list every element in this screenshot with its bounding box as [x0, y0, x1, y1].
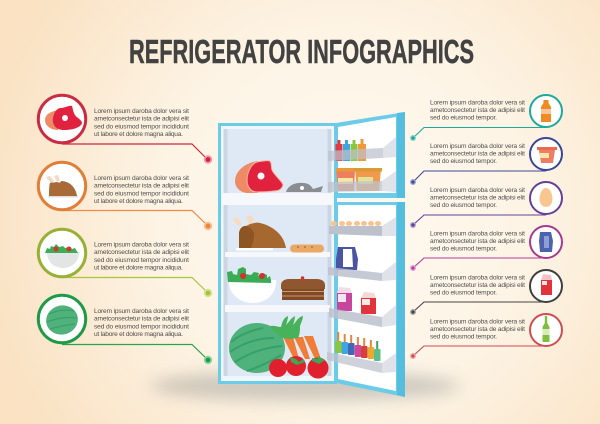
- text: egg: Lorem ipsum daroba dolor vera sit: [430, 187, 525, 194]
- door shelf with juice cartons: [329, 287, 396, 327]
- text: watermelon: ut labore et dolore magna aliqua.: [94, 331, 183, 338]
- text: bottle: [430, 100, 525, 122]
- text: milk bag: sed do eiusmod tempor.: [430, 246, 497, 252]
- text: wine: sed do eiusmod tempor.: [430, 334, 497, 340]
- text: meat: sed do eiusmod tempor incididunt: [94, 124, 189, 130]
- tomatoes: [269, 356, 328, 378]
- text: egg: sed do eiusmod tempor.: [430, 202, 497, 209]
- door shelf with eggs: [329, 217, 396, 236]
- salad bowl: [227, 267, 276, 303]
- icon: poultry: [38, 162, 86, 210]
- floor shadow: [150, 371, 460, 401]
- text: meat: [94, 108, 189, 138]
- connector: container: [413, 171, 546, 182]
- text: container: [430, 143, 525, 165]
- text: container: Lorem ipsum daroba dolor vera sit: [430, 143, 525, 150]
- text: juice: [430, 274, 525, 296]
- text: egg: [430, 187, 525, 209]
- icon: wine bottle: [530, 314, 562, 346]
- text: wine: [430, 318, 525, 340]
- text: container: sed do eiusmod tempor.: [430, 158, 497, 165]
- text: wine: Lorem ipsum daroba dolor vera sit: [430, 318, 525, 326]
- cake: [281, 276, 325, 300]
- door shelf with milk bag: [328, 247, 396, 281]
- icon: egg: [530, 182, 562, 214]
- panel: milk bag callout: [410, 226, 562, 271]
- text: milk bag: [430, 230, 525, 252]
- text: meat: Lorem ipsum daroba dolor vera sit: [94, 108, 189, 115]
- text: bottle: Lorem ipsum daroba dolor vera sit: [430, 100, 525, 106]
- text: watermelon: [94, 308, 189, 338]
- text: watermelon: sed do eiusmod tempor incididunt: [94, 324, 189, 330]
- icon: milk bag: [530, 226, 562, 258]
- text: wine: ametconsectetur ista de adipisi elit: [430, 326, 525, 333]
- text: salad: [94, 242, 189, 272]
- text: salad: ut labore et dolore magna aliqua.: [94, 264, 183, 272]
- text: meat: ametconsectetur ista de adipisi elit: [94, 116, 189, 123]
- text: poultry: ut labore et dolore magna aliqua.: [94, 198, 183, 205]
- text: poultry: Lorem ipsum daroba dolor vera sit: [94, 175, 189, 182]
- icon: bottle: [530, 95, 562, 127]
- text: bottle: ametconsectetur ista de adipisi elit: [430, 107, 525, 114]
- text: watermelon: ametconsectetur ista de adipisi elit: [94, 316, 189, 323]
- dot: egg: [410, 222, 416, 228]
- text: meat: ut labore et dolore magna aliqua.: [94, 131, 183, 138]
- fish: [286, 183, 323, 192]
- connector: watermelon: [62, 344, 208, 360]
- panel: watermelon callout: [38, 295, 212, 364]
- text: salad: sed do eiusmod tempor incididunt: [94, 257, 189, 264]
- panel: salad callout: [38, 229, 212, 297]
- text: milk bag: Lorem ipsum daroba dolor vera sit: [430, 230, 525, 238]
- text: poultry: [94, 175, 189, 205]
- panel: bottle callout: [410, 95, 562, 141]
- dot: wine: [410, 353, 416, 359]
- text: salad: ametconsectetur ista de adipisi elit: [94, 249, 189, 256]
- connector: salad: [62, 278, 208, 293]
- watermelon: [229, 323, 285, 373]
- icon: meat: [38, 95, 86, 143]
- lower door: [336, 202, 405, 397]
- carrots: [270, 316, 321, 359]
- icon: juice: [530, 270, 562, 302]
- door shelf with small bottles: [327, 332, 396, 373]
- panel: wine callout: [410, 314, 562, 359]
- dot: milk bag: [410, 265, 416, 271]
- upper door: [336, 112, 405, 198]
- text: poultry: ametconsectetur ista de adipisi elit: [94, 183, 189, 190]
- bread: [290, 244, 324, 252]
- connector: juice: [413, 302, 546, 312]
- icon: watermelon: [38, 295, 86, 343]
- text: juice: Lorem ipsum daroba dolor vera sit: [430, 274, 525, 282]
- turkey: [232, 215, 286, 250]
- text: milk bag: ametconsectetur ista de adipisi elit: [430, 238, 525, 245]
- connector: wine: [413, 346, 546, 356]
- fridge body: [218, 123, 337, 384]
- icon: salad: [38, 229, 86, 277]
- text: egg: ametconsectetur ista de adipisi elit: [430, 194, 525, 202]
- text: juice: ametconsectetur ista de adipisi elit: [430, 282, 525, 289]
- connector: egg: [413, 215, 546, 225]
- dot: poultry: [204, 222, 212, 230]
- panel: egg callout: [410, 182, 562, 228]
- fish eye: [300, 186, 304, 190]
- panel: meat callout: [38, 95, 212, 164]
- panel: poultry callout: [38, 162, 212, 230]
- door shelf with containers: [328, 168, 396, 192]
- text: bottle: sed do eiusmod tempor.: [430, 114, 497, 122]
- dot: juice: [410, 309, 416, 315]
- dot: bottle: [410, 135, 416, 141]
- dot: watermelon: [204, 356, 212, 364]
- dot: salad: [204, 289, 212, 297]
- door shelf with bottles: [328, 137, 396, 161]
- text: container: ametconsectetur ista de adipisi elit: [430, 150, 525, 158]
- panel: juice callout: [410, 270, 562, 315]
- text: poultry: sed do eiusmod tempor incididunt: [94, 190, 189, 198]
- connector: milk bag: [413, 258, 546, 268]
- dot: container: [410, 179, 416, 185]
- text: juice: sed do eiusmod tempor.: [430, 290, 497, 296]
- connector: bottle: [413, 128, 546, 138]
- panel: container callout: [410, 138, 562, 185]
- text: watermelon: Lorem ipsum daroba dolor vera sit: [94, 308, 189, 315]
- panel: refrigerator: [218, 112, 405, 397]
- connector: poultry: [62, 210, 208, 226]
- dot: meat: [204, 155, 212, 164]
- connector: meat: [62, 144, 208, 160]
- icon: container: [530, 138, 562, 170]
- meat: [235, 161, 283, 193]
- text: salad: Lorem ipsum daroba dolor vera sit: [94, 242, 189, 248]
